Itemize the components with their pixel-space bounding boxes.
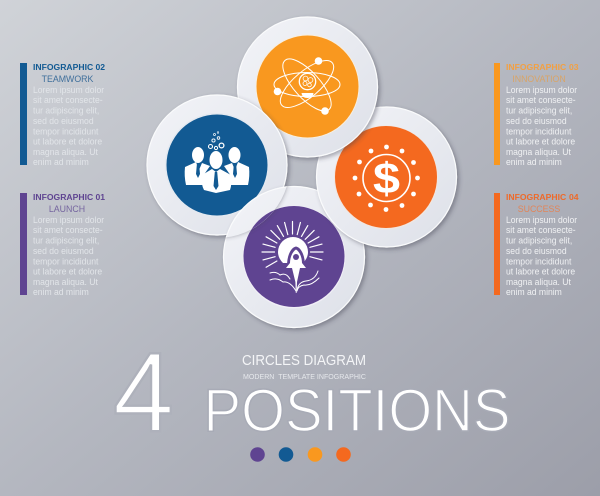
text block: infographic 01: sed do eiusmod xyxy=(33,246,94,256)
text block: infographic 02: tur adipiscing elit, xyxy=(33,105,99,116)
bar: innovation xyxy=(494,63,500,165)
title: circles diagram: CIRCLES DIAGRAM xyxy=(242,353,366,369)
circle: orange innovation xyxy=(238,17,378,157)
icon: atom with light bulb xyxy=(273,52,341,118)
text block: infographic 04: 04 xyxy=(569,192,579,202)
text block: infographic 02: INFOGRAPHIC xyxy=(33,62,93,72)
text block: infographic 02: sed do eiusmod xyxy=(33,116,94,126)
bar: teamwork xyxy=(20,63,27,165)
text block: infographic 04: sit amet consecte- xyxy=(506,225,576,235)
text block: infographic 02: sit amet consecte- xyxy=(33,95,103,105)
text block: infographic 01: 01 xyxy=(96,192,105,202)
legend dots xyxy=(250,447,351,462)
purple ring overlap over blue circle xyxy=(226,186,287,238)
text block: infographic 01: sit amet consecte- xyxy=(33,225,103,235)
text block: infographic 02: magna aliqua. Ut xyxy=(33,147,98,157)
subtitle: modern template infographic: MODERN TEMPLATE INFOGRAPHIC xyxy=(243,372,366,381)
icon: team of three people with gears xyxy=(185,132,249,193)
text block: infographic 03: INFOGRAPHIC xyxy=(506,62,566,72)
text block: infographic 04: enim ad minim xyxy=(506,287,562,297)
text block: infographic 01: magna aliqua. Ut xyxy=(33,277,98,287)
text block: infographic 04: INFOGRAPHIC xyxy=(506,192,566,202)
text block: infographic 02: Lorem ipsum dolor xyxy=(33,85,104,95)
text block: infographic 02: tempor incididunt xyxy=(33,126,99,137)
text block: infographic 03 xyxy=(506,62,579,167)
text block: infographic 03: tur adipiscing elit, xyxy=(506,105,572,116)
text block: infographic 03: sed do eiusmod xyxy=(506,116,567,126)
text block: infographic 02: ut labore et dolore xyxy=(33,136,102,147)
text block: infographic 04: SUCCESS xyxy=(518,204,560,214)
text block: infographic 03: INNOVATION xyxy=(512,74,566,84)
bar: success xyxy=(494,193,500,295)
text block: infographic 01: INFOGRAPHIC xyxy=(33,192,93,202)
text block: infographic 02: 02 xyxy=(96,62,105,72)
text block: infographic 01: LAUNCH xyxy=(49,204,85,214)
text block: infographic 04: tempor incididunt xyxy=(506,256,572,267)
text block: infographic 02: enim ad minim xyxy=(33,157,89,167)
text block: infographic 03: tempor incididunt xyxy=(506,126,572,137)
text block: infographic 04: sed do eiusmod xyxy=(506,246,567,256)
text block: infographic 01: tur adipiscing elit, xyxy=(33,235,99,246)
text block: infographic 04: magna aliqua. Ut xyxy=(506,277,571,287)
title: big 4: 4 xyxy=(113,329,174,455)
text block: infographic 03: sit amet consecte- xyxy=(506,95,576,105)
text block: infographic 02 xyxy=(33,62,105,167)
icon: dollar coin with dots: $ xyxy=(373,154,400,204)
text block: infographic 01: enim ad minim xyxy=(33,287,89,297)
circle: blue teamwork xyxy=(147,95,287,235)
icon: rocket with sun rays xyxy=(262,222,323,293)
text block: infographic 01 xyxy=(33,192,105,297)
text block: infographic 01: ut labore et dolore xyxy=(33,266,102,277)
text block: infographic 03: Lorem ipsum dolor xyxy=(506,85,577,95)
circle: orange-red success xyxy=(316,107,456,247)
text block: infographic 03: magna aliqua. Ut xyxy=(506,147,571,157)
text block: infographic 01: Lorem ipsum dolor xyxy=(33,215,104,225)
text block: infographic 03: enim ad minim xyxy=(506,157,562,167)
text block: infographic 03: ut labore et dolore xyxy=(506,136,575,147)
text block: infographic 04 xyxy=(506,192,579,297)
text block: infographic 01: tempor incididunt xyxy=(33,256,99,267)
text block: infographic 02: TEAMWORK xyxy=(42,74,94,84)
text block: infographic 04: tur adipiscing elit, xyxy=(506,235,572,246)
text block: infographic 04: ut labore et dolore xyxy=(506,266,575,277)
text block: infographic 04: Lorem ipsum dolor xyxy=(506,215,577,225)
circle: purple launch xyxy=(224,186,364,328)
bar: launch xyxy=(20,193,27,295)
text block: infographic 03: 03 xyxy=(569,62,579,72)
title: positions: POSITIONS xyxy=(204,376,510,444)
